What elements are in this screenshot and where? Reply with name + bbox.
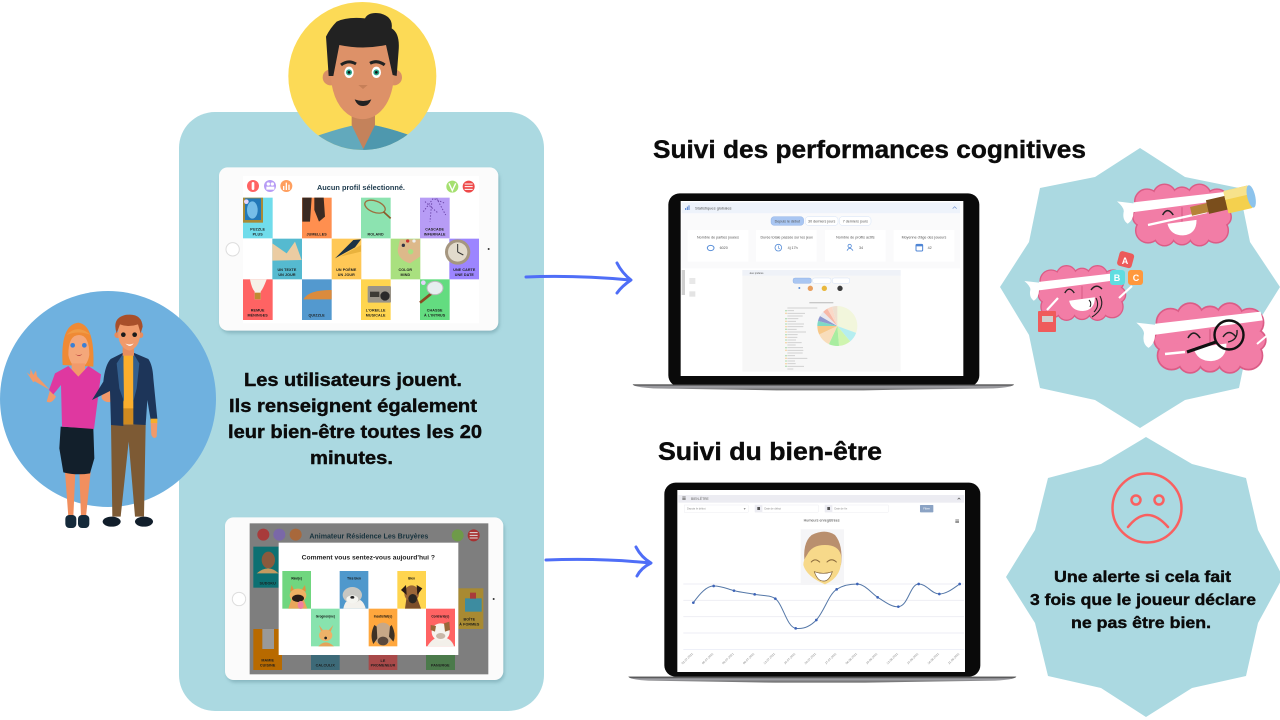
tablet: game menu screen: ROLAND (368, 233, 384, 237)
icon: brain with letter blocks: C (1133, 273, 1140, 283)
tablet: mood question screen: CALCULIX (316, 664, 335, 668)
laptop: global statistics dashboard: Nombre de profils actifs (836, 236, 875, 240)
laptop: wellbeing chart dashboard: Date de fin (834, 507, 848, 511)
laptop: wellbeing chart dashboard: 02.07.2021 (681, 652, 694, 665)
woman (27, 323, 112, 528)
laptop: wellbeing chart dashboard: 16.08.2021 (927, 652, 940, 665)
text block: users play: Les utilisateurs jouent. (244, 369, 462, 390)
tablet: game menu screen: PUZZLE (250, 228, 266, 232)
tablet: game menu screen: À L'INTRUS (424, 313, 446, 318)
panel: players background (179, 112, 544, 711)
laptop: wellbeing chart dashboard: 10.08.2021 (865, 652, 879, 665)
icon: brain with letter blocks: B (1114, 273, 1121, 283)
laptop: global statistics dashboard: Depuis le début (775, 219, 800, 223)
laptop: wellbeing chart dashboard: Filtrer (923, 507, 930, 511)
tablet: mood question screen: PROMENEUR (371, 664, 396, 668)
laptop: wellbeing chart dashboard: BIEN-ÊTRE (691, 496, 710, 501)
tablet: mood question screen: Ravi(e) (291, 577, 302, 581)
tablet: game menu screen: UNE DATE (455, 273, 474, 277)
arrow: to cognitive tracking (526, 263, 631, 293)
tablet: game menu screen: QUIZZLE (308, 314, 325, 318)
tablet: game menu screen: MÉNINGES (248, 313, 268, 318)
laptop: wellbeing chart dashboard: 27.07.2021 (824, 652, 838, 665)
laptop: global statistics dashboard: 4j 17h (788, 246, 798, 250)
tablet: game menu screen: CASCADE (425, 228, 445, 232)
star badge: cognitive brains (1000, 148, 1280, 428)
laptop: wellbeing chart dashboard: 05.07.2021 (701, 652, 715, 665)
laptop: wellbeing chart dashboard: Date de début (764, 507, 781, 511)
laptop: wellbeing chart dashboard: Humeurs enregistrées (804, 519, 840, 523)
tablet: game menu screen: MIND (400, 273, 410, 277)
laptop: global statistics dashboard: Moyenne d'âge des joueurs (902, 236, 947, 240)
heading: wellbeing tracking: Suivi du bien-être (658, 438, 882, 466)
tablet: game menu screen: REMUE (251, 308, 265, 312)
star badge: alert (1006, 437, 1280, 717)
tablet: mood question screen: PANURGE (431, 664, 450, 668)
tablet: mood question screen: SUDOKU (259, 582, 276, 586)
illustration: couple of users (27, 315, 157, 528)
text block: users play (228, 369, 482, 468)
icon: sad face (1112, 474, 1182, 542)
laptop: global statistics dashboard: 30 derniers jours (808, 219, 835, 223)
laptop: global statistics dashboard: Statistiques globales (695, 206, 732, 211)
laptop: global statistics dashboard: 42 (928, 246, 932, 250)
text block: alert: Une alerte si cela fait (1054, 569, 1232, 586)
laptop: global statistics dashboard: Nombre de parties jouées (697, 236, 739, 240)
circle: users background (0, 291, 216, 507)
laptop: wellbeing chart dashboard: 06.07.2021 (721, 652, 735, 665)
tablet: mood question screen: Comment vous sentez-vous aujourd'hui ? (302, 555, 435, 562)
text block: users play: minutes. (310, 447, 393, 468)
tablet: game menu screen: UN TEXTE (278, 268, 297, 272)
laptop: global statistics dashboard: Jeux préférés (749, 272, 764, 275)
tablet: game menu screen: Aucun profil sélectionné. (317, 183, 405, 192)
tablet: mood question screen (225, 517, 505, 683)
tablet: game menu screen: UN JOUR (338, 273, 355, 277)
tablet: game menu screen: MUSICALE (366, 314, 386, 318)
tablet: mood question screen: Insatisfait(e) (374, 614, 392, 618)
laptop: global statistics dashboard: 6020 (720, 246, 728, 250)
laptop: global statistics dashboard: 7 derniers jours (843, 219, 868, 223)
icon: brain with magnifier (1136, 304, 1272, 372)
tablet: game menu screen: UN POÈME (336, 267, 357, 272)
tablet: game menu screen: PLUS (253, 233, 263, 237)
tablet: game menu screen: CHASSE (427, 308, 443, 312)
laptop: global statistics dashboard: Durée totale passée sur les jeux (761, 236, 813, 240)
tablet: mood question screen: Bien (408, 577, 415, 581)
laptop: wellbeing chart dashboard: 08.07.2021 (742, 652, 756, 665)
icon: brain with letter blocks (1024, 250, 1143, 332)
laptop: global statistics dashboard: 34 (859, 246, 863, 250)
man (92, 315, 157, 527)
text block: alert: 3 fois que le joueur déclare (1030, 592, 1256, 609)
tablet: game menu screen: INFERNALE (424, 233, 446, 237)
avatar: animator portrait (288, 2, 436, 157)
tablet: mood question screen: À FORMES (459, 622, 480, 627)
text block: alert: ne pas être bien. (1071, 615, 1211, 632)
laptop: wellbeing chart dashboard: 16.07.2021 (783, 652, 797, 665)
icon: brain with letter blocks: A (1122, 256, 1129, 266)
tablet: mood question screen: Très bien (347, 577, 361, 581)
text block: alert (1030, 569, 1256, 632)
tablet: mood question screen: Grognon(ne) (316, 614, 335, 618)
tablet: mood question screen: BOÎTE (463, 617, 476, 622)
laptop: wellbeing chart dashboard: 13.07.2021 (763, 652, 776, 665)
heading: cognitive tracking: Suivi des performances cognitives (653, 136, 1086, 164)
laptop: global statistics dashboard (633, 193, 1014, 390)
laptop: wellbeing chart dashboard: Depuis le début (687, 507, 706, 511)
tablet: game menu screen: UN JOUR (278, 273, 296, 277)
laptop: wellbeing chart dashboard (628, 483, 1016, 683)
tablet: mood question screen: CUISINE (260, 664, 276, 668)
laptop: wellbeing chart dashboard: 14.08.2021 (906, 652, 920, 665)
tablet: game menu screen: UNE CARTE (453, 268, 476, 272)
text block: users play: leur bien-être toutes les 20 (228, 421, 482, 442)
tablet: game menu screen: JUMELLES (307, 233, 327, 237)
laptop: wellbeing chart dashboard: 21.08.2021 (947, 652, 961, 665)
text block: users play: Ils renseignent également (229, 395, 477, 416)
tablet: mood question screen: Contrarié(e) (431, 614, 449, 618)
tablet: mood question screen: LE (381, 659, 386, 663)
laptop: wellbeing chart dashboard: 20.07.2021 (804, 652, 817, 665)
tablet: mood question screen: Animateur Résidence Les Bruyères (309, 533, 428, 540)
tablet: mood question screen: MAMIE (261, 659, 274, 663)
tablet: game menu screen: L'OREILLE (366, 308, 386, 312)
icon: brain with telescope (1117, 184, 1258, 245)
tablet: game menu screen (219, 167, 500, 333)
tablet: game menu screen: COLOR (398, 268, 412, 272)
arrow: to wellbeing tracking (546, 547, 651, 576)
laptop: wellbeing chart dashboard: 13.08.2021 (886, 652, 899, 665)
laptop: wellbeing chart dashboard: 06.08.2021 (845, 652, 858, 665)
